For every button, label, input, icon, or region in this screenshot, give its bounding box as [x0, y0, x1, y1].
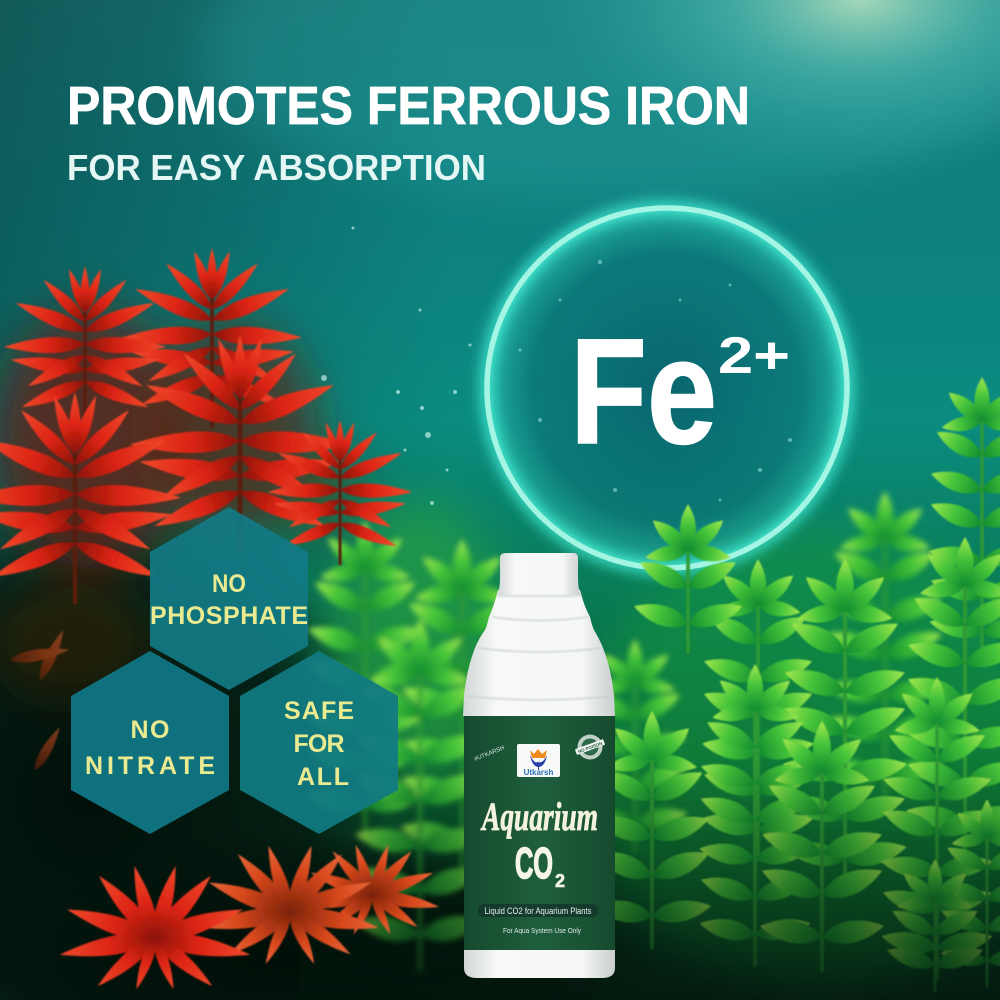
tagline strip: Liquid CO2 for Aquarium Plants: [484, 906, 592, 916]
hexagon: safe for all: SAFE: [284, 697, 354, 725]
title: [67, 76, 750, 188]
hexagon: safe for all: [240, 651, 398, 834]
depth shading at bottom: [300, 760, 1000, 1000]
bottle cap: [497, 553, 581, 595]
hexagon: no nitrate: [71, 651, 229, 834]
green plants right: [591, 377, 1000, 992]
bottle label: [464, 716, 615, 950]
hexagon: no phosphate: PHOSPHATE: [150, 602, 308, 630]
red plants bottom rosettes: [58, 843, 440, 992]
Fe symbol: Fe: [570, 307, 717, 475]
hexagon: no nitrate: NITRATE: [85, 752, 215, 780]
seal badge: NO POISON: [577, 741, 603, 754]
tagline strip: [478, 904, 598, 917]
Utkarsh logo: Utkarsh: [524, 768, 554, 777]
Fe2+ bubble: [487, 208, 847, 568]
CO2: 2: [555, 871, 565, 891]
CO2: CO: [515, 839, 553, 888]
bubble stream: [321, 226, 472, 505]
Utkarsh logo: [517, 744, 560, 777]
blurred background green plants: [304, 491, 946, 972]
green plant in front of bubble: [631, 504, 745, 654]
hexagon: no phosphate: NO: [212, 570, 246, 598]
seal badge: [575, 734, 605, 760]
dim lower leaves left: [9, 628, 70, 772]
hexagon: no phosphate: [150, 507, 308, 690]
bottle shoulders: [463, 590, 615, 716]
red foliage backdrop: [0, 310, 360, 700]
red plants cluster upper left: [0, 248, 413, 604]
bottle base: [464, 948, 615, 978]
title: FOR EASY ABSORPTION: [67, 147, 486, 188]
product bottle: [463, 553, 615, 978]
product name: Aquarium: [480, 794, 598, 839]
hexagon: safe for all: ALL: [297, 763, 349, 791]
charge 2+: 2+: [718, 327, 790, 385]
hashtag: #UTKARSH: [474, 745, 506, 763]
hexagon: no nitrate: NO: [130, 716, 170, 744]
usage note: For Aqua System Use Only: [503, 926, 581, 935]
hexagon: safe for all: FOR: [294, 730, 344, 758]
title: PROMOTES FERROUS IRON: [67, 76, 750, 136]
